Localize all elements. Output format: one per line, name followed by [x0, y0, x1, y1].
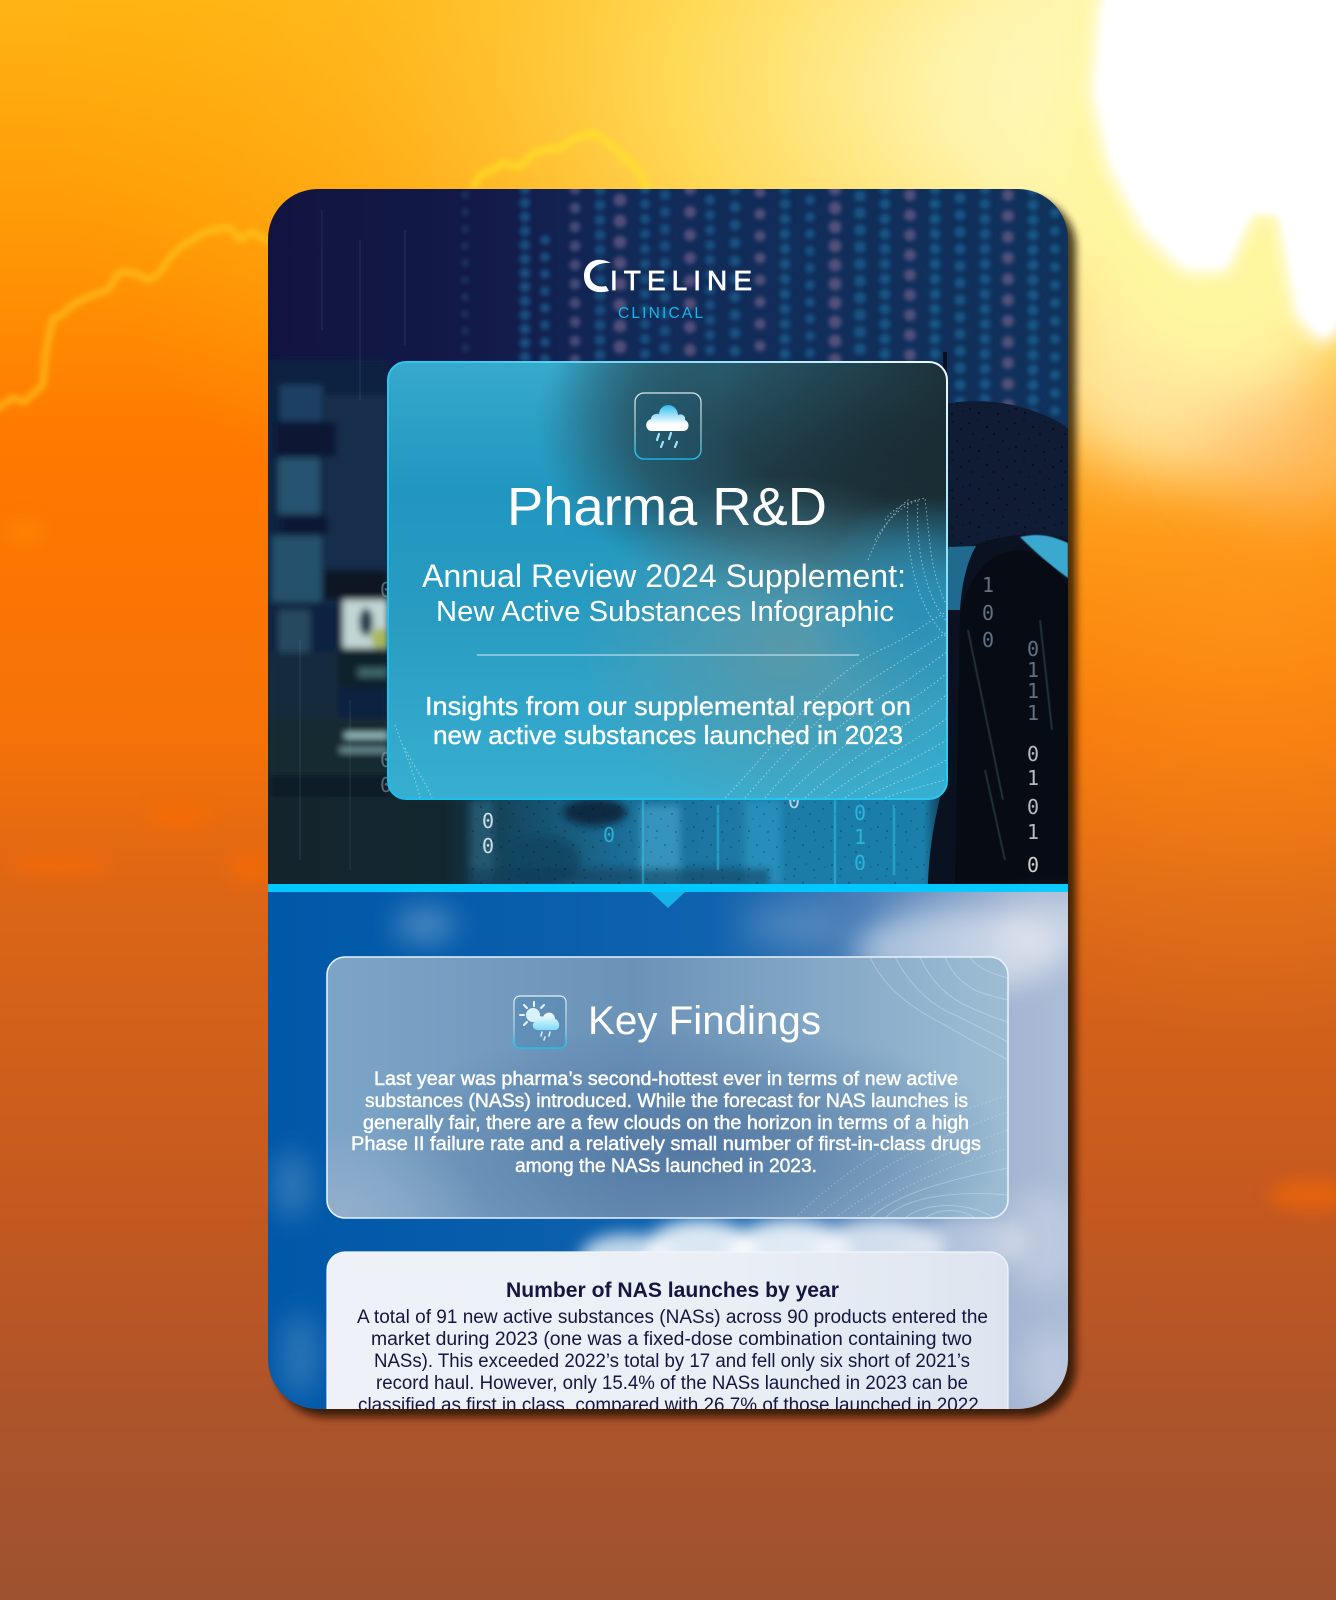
panel subtitle: New Active Substances Infographic	[436, 596, 894, 628]
binary digits: 0	[1027, 853, 1039, 877]
binary digits: 0	[482, 834, 494, 858]
header logo: Citeline Clinical	[584, 260, 752, 322]
binary digits: 1	[1027, 766, 1039, 790]
NAS launches panel	[326, 1251, 1009, 1409]
topographic dotted lines	[395, 498, 950, 798]
hero image: rainy data street	[268, 189, 1068, 886]
topographic contour lines	[795, 957, 1008, 1218]
binary digits: 1	[1027, 679, 1039, 703]
panel description: new active substances launched in 2023	[433, 720, 903, 750]
rain streaks	[300, 210, 405, 870]
binary digits: 1	[982, 573, 994, 597]
binary digits: 0	[380, 748, 392, 772]
cloud edge highlights	[0, 133, 648, 410]
panel heading: Number of NAS launches by year	[506, 1279, 839, 1302]
binary digits: 0	[603, 823, 615, 847]
panel title: Pharma R&D	[507, 477, 827, 537]
panel text: classified as first in class, compared with 26.7% of those launched in 2022.	[358, 1395, 984, 1416]
binary digits: 0	[982, 628, 994, 652]
binary digits: 1	[1027, 701, 1039, 725]
figure with umbrella	[928, 352, 1068, 885]
binary digits: 0	[788, 789, 800, 813]
binary digits: 1	[1027, 820, 1039, 844]
binary digits: 0	[1027, 637, 1039, 661]
findings text: substances (NASs) introduced. While the forecast for NAS launches is	[365, 1091, 968, 1112]
icon: rain cloud	[635, 393, 701, 459]
binary digits: 0	[380, 578, 392, 602]
findings text: generally fair, there are a few clouds on the horizon in terms of a high	[363, 1113, 969, 1134]
panel description	[427, 696, 910, 744]
binary digits: 0	[1027, 742, 1039, 766]
findings text: among the NASs launched in 2023.	[515, 1156, 817, 1177]
panel heading: Key Findings	[588, 999, 821, 1043]
panel text: NASs). This exceeded 2022’s total by 17 and fell only six short of 2021’s	[374, 1351, 970, 1372]
findings text: Phase II failure rate and a relatively small number of first-in-class drugs	[351, 1134, 981, 1155]
binary rain columns	[465, 189, 1055, 430]
panel description: Insights from our supplemental report on	[425, 691, 911, 721]
binary digits: 0	[854, 851, 866, 875]
binary digits: 0	[854, 801, 866, 825]
sky section	[268, 892, 1100, 1412]
wet road	[268, 797, 940, 884]
panel text: A total of 91 new active substances (NASs) across 90 products entered the	[357, 1307, 988, 1328]
logo mark C	[584, 260, 611, 292]
buildings and doorway	[268, 360, 393, 818]
main card	[268, 189, 1100, 1452]
key findings panel	[327, 957, 1008, 1218]
panel subtitle: Annual Review 2024 Supplement:	[422, 558, 906, 594]
pointer	[651, 892, 685, 908]
binary digits: 1	[1027, 658, 1039, 682]
icon: sun behind rain cloud	[514, 996, 566, 1048]
panel text: record haul. However, only 15.4% of the NASs launched in 2023 can be	[376, 1373, 968, 1394]
card shadow	[276, 197, 1076, 1417]
binary digits: 0	[982, 601, 994, 625]
title panel	[388, 362, 950, 799]
findings text: Last year was pharma’s second-hottest ever in terms of new active	[374, 1069, 958, 1090]
binary digits: 1	[854, 825, 866, 849]
sub-brand: CLINICAL	[618, 305, 703, 322]
binary digits	[380, 573, 1039, 877]
divider bar	[268, 884, 1068, 892]
wordmark: ITELINE	[610, 265, 752, 296]
binary digits: 0	[1027, 795, 1039, 819]
binary digits: 0	[380, 773, 392, 797]
findings text	[351, 1069, 981, 1177]
binary digits: 0	[482, 809, 494, 833]
sun glow	[1050, 0, 1336, 380]
panel text	[357, 1307, 988, 1416]
panel subtitle	[422, 558, 906, 628]
panel text: market during 2023 (one was a fixed-dose combination containing two	[371, 1329, 972, 1350]
